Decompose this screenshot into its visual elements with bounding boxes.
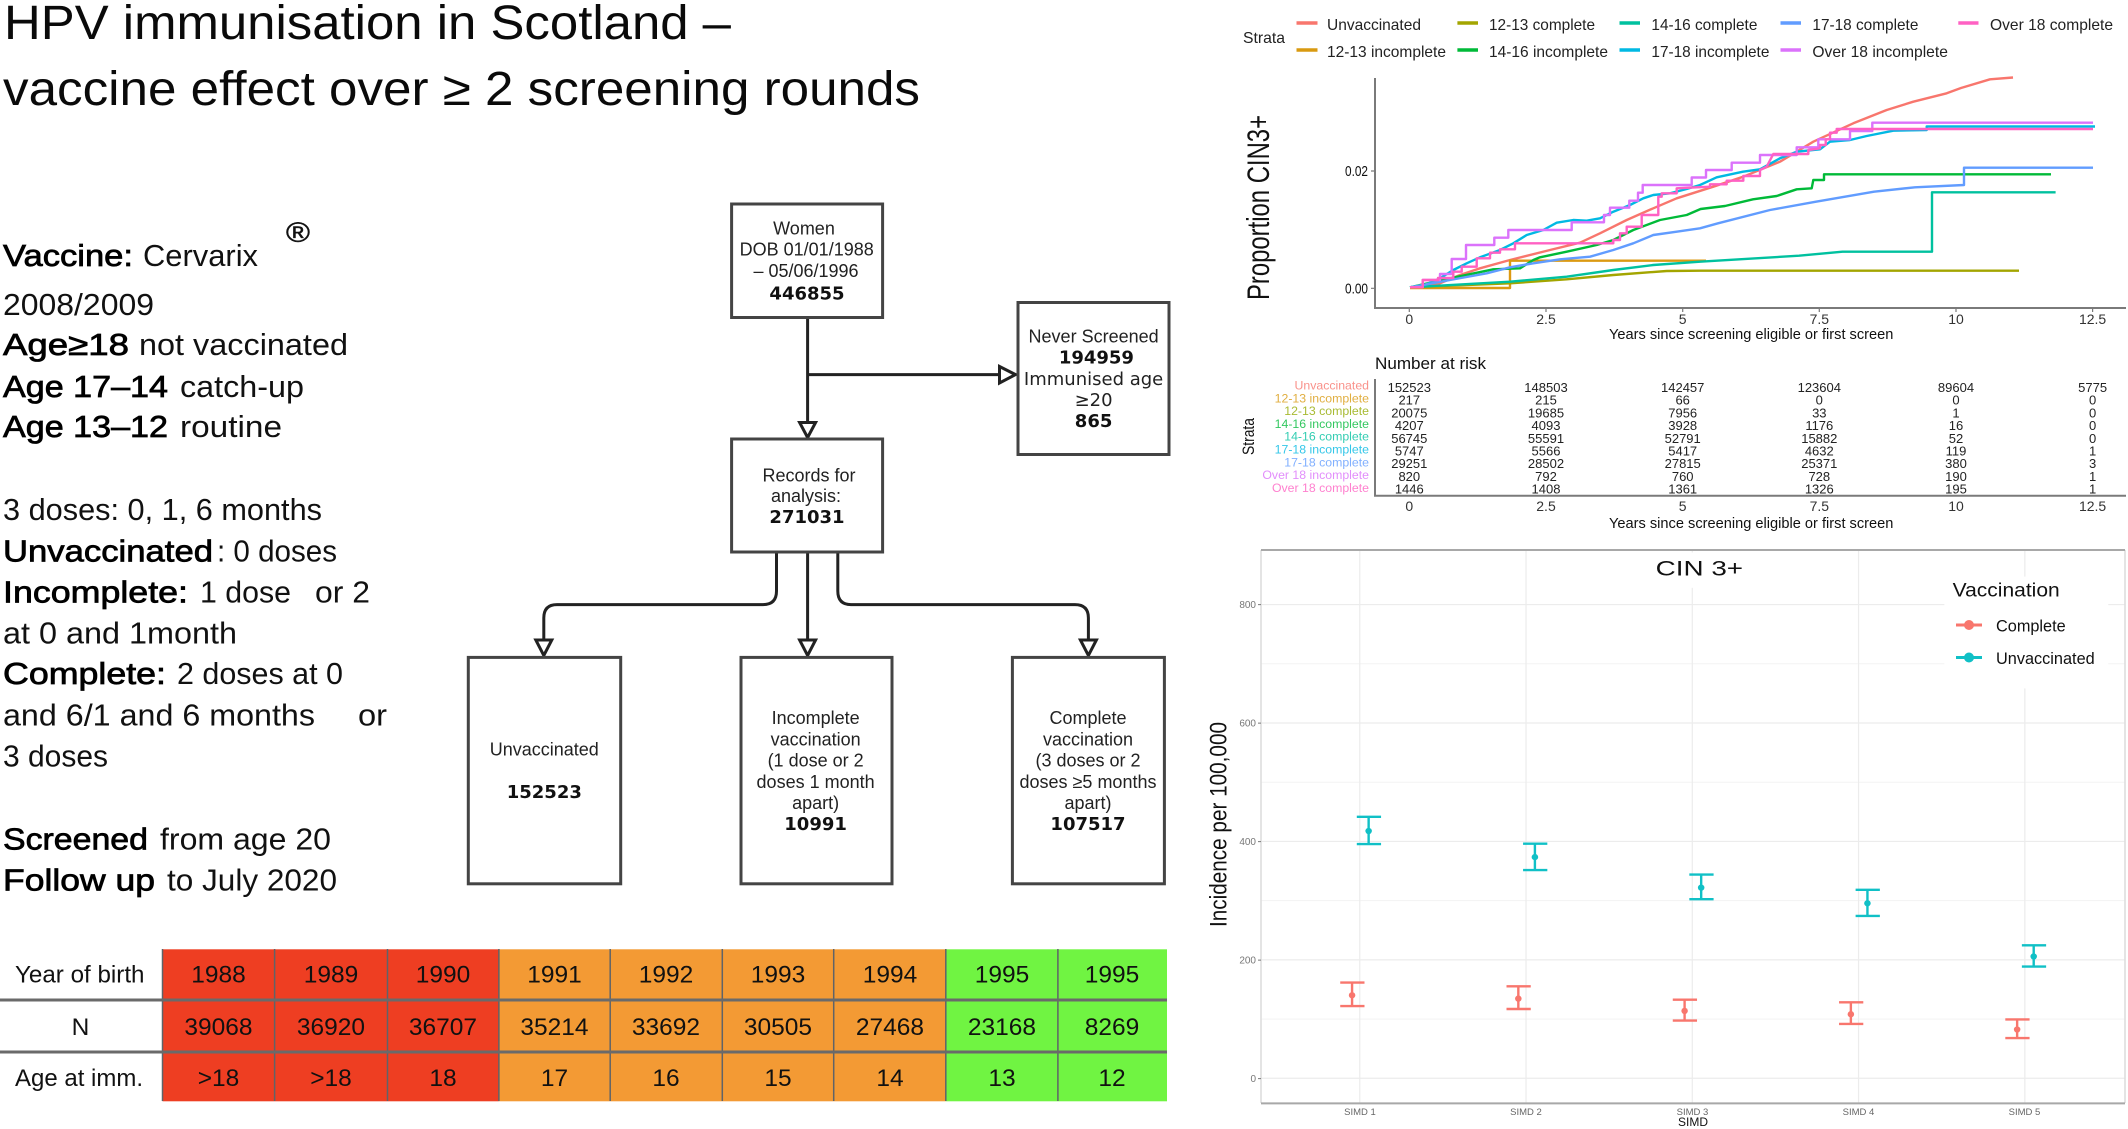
legend: strata: 12-13 incomplete (1327, 44, 1446, 61)
table: number at risk: 52791 (1665, 431, 1701, 446)
box: incomplete vaccination: 10991 (784, 814, 847, 835)
table: birth cohorts: 12 (1098, 1065, 1126, 1092)
table: number at risk: 3928 (1668, 418, 1697, 433)
legend: strata (1243, 17, 2113, 61)
text block: vaccine programme details: or 2 (315, 574, 370, 609)
box: unvaccinated: Unvaccinated (490, 740, 599, 760)
legend: strata: 17-18 complete (1812, 17, 1918, 34)
arrow: women to records (800, 318, 816, 438)
legend: vaccination: Unvaccinated (1996, 649, 2095, 668)
table: birth cohorts: 23168 (968, 1014, 1036, 1041)
table: number at risk: 56745 (1391, 431, 1427, 446)
table: birth cohorts: Year of birth (15, 962, 144, 989)
table: number at risk: Strata (1240, 418, 1258, 455)
table: number at risk: 20075 (1391, 405, 1427, 420)
legend: strata: 17-18 incomplete (1651, 44, 1769, 61)
box: women: – 05/06/1996 (753, 261, 859, 281)
text block: vaccine programme details: and 6/1 and 6 months (3, 698, 315, 733)
line chart: proportion CIN3+ by strata: 0 (1405, 311, 1413, 327)
table: number at risk: Over 18 complete (1272, 481, 1369, 495)
table: birth cohorts: 8269 (1085, 1014, 1139, 1041)
table: number at risk: 5 (1679, 498, 1687, 514)
table: birth cohorts: 30505 (744, 1014, 812, 1041)
y tick labels: 800 (1239, 600, 1256, 611)
table: number at risk: 728 (1808, 469, 1830, 484)
legend: strata: Over 18 incomplete (1812, 44, 1948, 61)
table: number at risk: 0 (1952, 393, 1960, 408)
box: complete vaccination: vaccination (1043, 730, 1133, 750)
box: complete vaccination: doses ≥5 months (1020, 772, 1156, 792)
box: women: DOB 01/01/1988 (740, 240, 874, 260)
table: number at risk: 14-16 complete (1284, 430, 1369, 444)
text block: vaccine programme details: 3 doses: 0, 1, 6 months (3, 492, 322, 527)
box: complete vaccination: (3 doses or 2 (1035, 751, 1141, 771)
y tick labels (1239, 600, 1256, 1085)
table: number at risk: 0 (2089, 405, 2096, 420)
table: number at risk: 12-13 incomplete (1275, 391, 1369, 405)
text block: vaccine programme details: or (358, 698, 387, 733)
table: number at risk: 7956 (1668, 405, 1697, 420)
box: women: 446855 (769, 283, 845, 304)
table: number at risk: 12.5 (2079, 498, 2106, 514)
table: number at risk: 217 (1398, 393, 1420, 408)
table: birth cohorts: 16 (652, 1065, 680, 1092)
box: records for analysis: analysis: (771, 486, 841, 506)
box: complete vaccination (1012, 657, 1164, 884)
table: number at risk: 55591 (1528, 431, 1564, 446)
table: number at risk: 17-18 incomplete (1275, 442, 1369, 456)
curve: over 18 complete (1410, 129, 2093, 287)
panel: CIN 3+ incidence by SIMD (1205, 550, 2125, 1129)
text block: vaccine programme details: routine (180, 409, 282, 444)
table: birth cohorts: 1989 (304, 962, 358, 989)
text block: vaccine programme details: from age 20 (160, 821, 331, 856)
table: birth cohorts: 17 (541, 1065, 568, 1092)
table: number at risk: 5417 (1668, 444, 1697, 458)
legend: vaccination: Vaccination (1953, 580, 2060, 601)
x tick labels: SIMD 3 (1677, 1107, 1708, 1118)
table: number at risk: 52 (1949, 431, 1963, 446)
box: records for analysis (732, 439, 883, 552)
y tick labels: 0 (1250, 1074, 1256, 1085)
text block: vaccine programme details: Unvaccinated (3, 534, 213, 569)
table: number at risk: 1 (2089, 469, 2096, 484)
table: birth cohorts: 15 (764, 1065, 792, 1092)
table: birth cohorts: 35214 (520, 1014, 589, 1041)
table: birth cohorts: 1990 (416, 962, 470, 989)
legend: vaccination (1953, 580, 2095, 668)
y axis label: Proportion CIN3+ (1241, 115, 1276, 300)
curve: unvaccinated (1410, 78, 2013, 287)
box: incomplete vaccination: Incomplete (772, 708, 860, 728)
line chart: proportion CIN3+ by strata: 5 (1679, 311, 1687, 327)
text block: vaccine programme details: Incomplete: (3, 574, 188, 609)
legend: strata: Unvaccinated (1327, 17, 1421, 34)
table: number at risk: 4207 (1395, 418, 1424, 433)
table: number at risk: 2.5 (1536, 498, 1556, 514)
table: number at risk: 1176 (1805, 418, 1833, 433)
y tick labels: 600 (1239, 719, 1256, 730)
table: birth cohorts: 27468 (856, 1014, 924, 1041)
box: complete vaccination: 107517 (1050, 814, 1126, 835)
box: never screened: Immunised age (1024, 369, 1163, 390)
x axis label: SIMD (1678, 1115, 1708, 1129)
table: number at risk: 0 (2089, 393, 2096, 408)
legend: strata: 14-16 incomplete (1489, 44, 1608, 61)
legend: vaccination: Complete (1996, 616, 2066, 635)
box: unvaccinated (468, 657, 621, 884)
arrow: to complete (838, 552, 1096, 656)
box: unvaccinated: 152523 (507, 782, 582, 803)
chart title: CIN 3+ (1656, 558, 1743, 580)
table: number at risk: 29251 (1391, 456, 1427, 471)
table: number at risk: 195 (1945, 482, 1967, 497)
table: number at risk: 4632 (1805, 444, 1834, 458)
flowchart (468, 204, 1169, 884)
x tick labels: SIMD 1 (1344, 1107, 1376, 1118)
table: number at risk: 0 (1405, 498, 1413, 514)
table: number at risk: 1361 (1668, 482, 1697, 497)
table: birth cohorts: 36920 (297, 1014, 365, 1041)
line chart: proportion CIN3+ by strata: Years since screening eligible or first screen (1609, 326, 1893, 343)
table: number at risk: 27815 (1665, 456, 1701, 471)
table: number at risk: 792 (1535, 469, 1557, 484)
table: number at risk: 7.5 (1810, 498, 1829, 514)
text block: vaccine programme details: 2008/2009 (3, 287, 154, 322)
line chart: proportion CIN3+ by strata (1241, 78, 2126, 343)
table: birth cohorts: >18 (310, 1065, 352, 1092)
table: number at risk: 5747 (1395, 444, 1424, 458)
table: number at risk: 119 (1946, 444, 1966, 458)
curve: 14-16 complete (1410, 192, 2056, 287)
table: number at risk: 1 (1952, 405, 1960, 420)
text block: vaccine programme details: 1 dose (200, 574, 291, 609)
text block: vaccine programme details: Age≥18 (3, 327, 129, 362)
line chart: proportion CIN3+ by strata: 2.5 (1536, 311, 1556, 327)
box: never screened: Never Screened (1029, 326, 1159, 346)
table: number at risk: 14-16 incomplete (1275, 417, 1369, 431)
curve: 14-16 incomplete (1410, 174, 2051, 287)
text block: vaccine programme details: : 0 doses (217, 534, 337, 569)
text block: vaccine programme details: Age 17–14 (3, 369, 168, 404)
table: number at risk: 17-18 complete (1284, 455, 1369, 469)
table: number at risk: 152523 (1388, 380, 1431, 395)
text block: vaccine programme details: Cervarix (143, 238, 258, 273)
box: incomplete vaccination: vaccination (771, 730, 861, 750)
x tick labels: SIMD 2 (1510, 1107, 1542, 1118)
line chart: proportion CIN3+ by strata: 12.5 (2079, 311, 2106, 327)
box: never screened: ≥20 (1075, 390, 1113, 411)
text block: vaccine programme details: not vaccinated (139, 327, 348, 362)
table: number at risk: 123604 (1798, 380, 1841, 395)
curve: 17-18 incomplete (1410, 126, 2095, 287)
box: incomplete vaccination (741, 657, 892, 884)
table: number at risk: 89604 (1938, 380, 1974, 395)
text block: vaccine programme details: Screened (3, 821, 148, 856)
box: incomplete vaccination: (1 dose or 2 (768, 751, 864, 771)
text block: vaccine programme details: 2 doses at 0 (177, 656, 343, 691)
table: number at risk: 820 (1398, 469, 1420, 484)
table: number at risk: 0 (2089, 418, 2096, 433)
table: number at risk: 1326 (1805, 482, 1834, 497)
curve: 17-18 complete (1410, 168, 2093, 287)
box: incomplete vaccination: doses 1 month (757, 772, 875, 792)
table: birth cohorts: >18 (198, 1065, 239, 1092)
box: women (732, 204, 883, 318)
box: never screened (1018, 302, 1169, 454)
y tick labels: 400 (1239, 837, 1256, 848)
arrow: to never screened (808, 366, 1016, 383)
table: number at risk: 33 (1812, 405, 1827, 420)
table: birth cohorts: Age at imm. (15, 1065, 143, 1092)
table: number at risk: 5775 (2078, 380, 2107, 395)
title (3, 0, 920, 116)
table: number at risk: Unvaccinated (1294, 378, 1369, 392)
table: number at risk: 3 (2089, 456, 2096, 471)
legend: strata: 14-16 complete (1651, 17, 1757, 34)
table: birth cohorts: 39068 (184, 1014, 253, 1041)
legend: strata: 12-13 complete (1489, 17, 1595, 34)
line chart: proportion CIN3+ by strata: 0.02 (1345, 163, 1368, 180)
table: birth cohorts: 36707 (409, 1014, 477, 1041)
line chart: proportion CIN3+ by strata: 10 (1948, 311, 1964, 327)
table: birth cohorts: 33692 (632, 1014, 700, 1041)
text block: vaccine programme details: catch-up (180, 369, 304, 404)
text block: vaccine programme details: at 0 and 1month (3, 615, 237, 650)
table: number at risk: 16 (1949, 418, 1963, 433)
line chart: proportion CIN3+ by strata: 7.5 (1810, 311, 1829, 327)
box: women: Women (773, 218, 835, 238)
error bars: unvaccinated (1357, 817, 2046, 967)
table: birth cohorts: 1993 (751, 962, 805, 989)
table: birth cohorts: 1988 (191, 962, 246, 989)
text block: vaccine programme details: to July 2020 (167, 863, 337, 898)
text block: vaccine programme details: Vaccine: (3, 238, 133, 273)
table: number at risk: 1 (2089, 444, 2096, 458)
box: complete vaccination: Complete (1049, 708, 1127, 728)
y axis label: Incidence per 100,000 (1205, 722, 1232, 927)
box: complete vaccination: apart) (1064, 793, 1112, 813)
x tick labels: SIMD 5 (2009, 1107, 2040, 1118)
table: number at risk: 1446 (1395, 482, 1424, 497)
table: number at risk: 19685 (1528, 405, 1564, 420)
box: incomplete vaccination: apart) (792, 793, 839, 813)
arrow: to unvaccinated (536, 552, 776, 656)
table: number at risk: 5566 (1532, 444, 1560, 458)
curve: 12-13 complete (1410, 271, 2019, 287)
table: number at risk: 215 (1535, 393, 1557, 408)
table: number at risk: 10 (1948, 498, 1964, 514)
text block: vaccine programme details: Age 13–12 (3, 409, 168, 444)
box: never screened: 194959 (1059, 348, 1134, 369)
legend: strata: Over 18 complete (1990, 17, 2113, 34)
curve: over 18 incomplete (1410, 123, 2093, 287)
table: birth cohorts: 1994 (863, 962, 917, 989)
text block: vaccine programme details: Follow up (3, 863, 155, 898)
table: number at risk: Number at risk (1375, 354, 1486, 373)
table: number at risk: 142457 (1661, 380, 1704, 395)
text block: vaccine programme details: Complete: (3, 656, 166, 691)
box: never screened: 865 (1075, 411, 1112, 432)
title: vaccine effect over ≥ 2 screening rounds (3, 63, 920, 116)
x tick labels: SIMD 4 (1843, 1107, 1874, 1118)
table: birth cohorts: 14 (876, 1065, 904, 1092)
table: birth cohorts: N (72, 1014, 89, 1041)
table: number at risk: Over 18 incomplete (1262, 468, 1369, 482)
x tick labels (1344, 1107, 2040, 1118)
table: number at risk: 1 (2089, 482, 2096, 497)
table: number at risk: 190 (1945, 469, 1967, 484)
table: number at risk: 148503 (1524, 380, 1568, 395)
text block: vaccine programme details (3, 217, 387, 898)
curve: 12-13 incomplete (1410, 261, 1706, 288)
table: number at risk (1240, 354, 2126, 532)
error bars: complete (1340, 983, 2030, 1038)
table: number at risk: 66 (1675, 393, 1690, 408)
table: number at risk: 1408 (1532, 482, 1560, 497)
table: birth cohorts: 18 (429, 1065, 457, 1092)
text block: vaccine programme details: 3 doses (3, 739, 108, 774)
table: number at risk: 25371 (1801, 456, 1837, 471)
box: records for analysis: 271031 (769, 507, 845, 528)
table: number at risk: 12-13 complete (1284, 404, 1369, 418)
table: number at risk: 4093 (1532, 418, 1560, 433)
table: birth cohorts: 1992 (639, 962, 693, 989)
table: number at risk: Years since screening eligible or first screen (1609, 515, 1893, 532)
table: birth cohorts (0, 949, 1167, 1101)
text block: vaccine programme details: ® (286, 217, 310, 248)
table: birth cohorts: 1995 (1085, 962, 1139, 989)
arrow: to incomplete (800, 552, 816, 656)
table: birth cohorts: 1995 (975, 962, 1029, 989)
legend: strata: Strata (1243, 30, 1285, 47)
table: number at risk: 28502 (1528, 456, 1564, 471)
table: number at risk: 15882 (1801, 431, 1837, 446)
y tick labels: 200 (1239, 956, 1256, 967)
line chart: proportion CIN3+ by strata: 0.00 (1345, 280, 1368, 298)
table: birth cohorts: 13 (988, 1065, 1016, 1092)
table: number at risk: 0 (1816, 393, 1823, 408)
table: number at risk: 0 (2089, 431, 2096, 446)
table: birth cohorts: 1991 (527, 962, 582, 989)
table: number at risk: 380 (1945, 456, 1967, 471)
table: number at risk: 760 (1672, 469, 1694, 484)
box: records for analysis: Records for (762, 466, 856, 486)
